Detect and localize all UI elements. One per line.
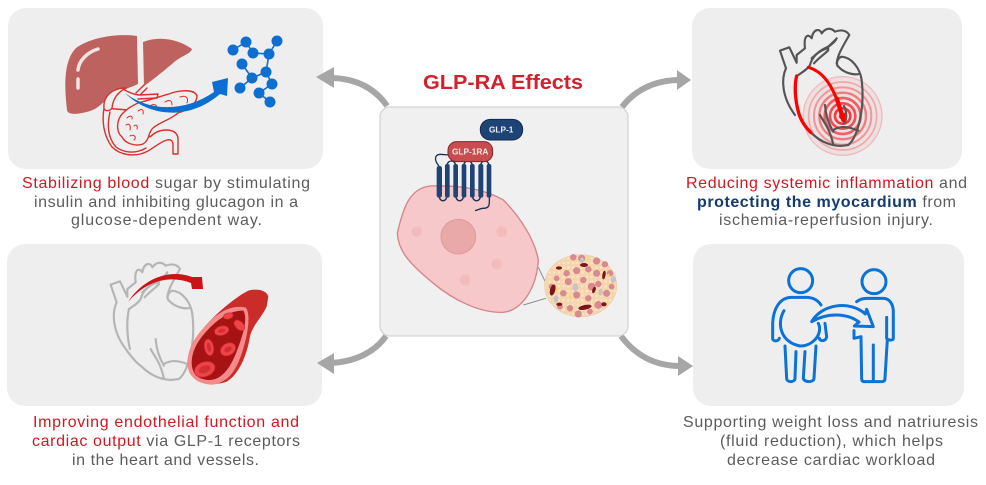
text: top-left caption: Stabilizing blood sugar by stimulating	[22, 175, 310, 192]
text: top-left caption	[22, 175, 310, 229]
text: bottom-right caption	[683, 414, 978, 469]
badge: GLP-1RA	[448, 142, 493, 162]
text: top-right caption	[686, 175, 967, 229]
receptor	[435, 154, 491, 211]
text: top-right caption: ischemia-reperfusion injury.	[719, 212, 933, 229]
icon: two figures with arrow	[773, 269, 893, 382]
text: top-left caption: glucose-dependent way.	[71, 212, 262, 229]
icon: pancreas and duodenum	[103, 85, 197, 155]
title: GLP-RA Effects	[423, 72, 583, 94]
arrow: to top-right panel	[622, 70, 691, 107]
icon: heart with target rings	[780, 29, 883, 156]
panel: top-right inflammation	[692, 8, 962, 169]
cell body	[397, 186, 538, 312]
icon: liver	[65, 35, 192, 114]
panel: centre cell illustration	[380, 107, 628, 336]
arrow: to bottom-right panel	[621, 336, 693, 376]
text: top-left caption: insulin and inhibiting glucagon in a	[34, 194, 298, 211]
text: bottom-right caption: decrease cardiac workload	[727, 452, 935, 469]
icon: blue arrow	[125, 78, 228, 113]
text: bottom-left caption	[32, 414, 300, 469]
text: bottom-right caption: Supporting weight loss and natriuresis	[683, 414, 978, 431]
text: top-right caption: Reducing systemic inflammation and	[686, 175, 967, 192]
text: bottom-left caption: in the heart and vessels.	[72, 452, 259, 469]
icon: red arc arrow	[128, 274, 203, 302]
panel: bottom-left endothelial	[7, 244, 322, 406]
badge: GLP-1: GLP-1	[489, 126, 514, 135]
icon: molecule	[228, 36, 282, 107]
arrow: to bottom-left panel	[317, 336, 386, 374]
text: bottom-left caption: cardiac output via GLP-1 receptors	[32, 433, 300, 450]
arrow: to top-left panel	[316, 67, 387, 106]
text: bottom-left caption: Improving endothelial function and	[33, 414, 299, 431]
panel: top-left blood sugar	[8, 8, 323, 169]
icon: blood vessel	[188, 290, 268, 385]
connector lines to islet	[523, 267, 546, 305]
badge: GLP-1RA: GLP-1RA	[452, 147, 489, 156]
badge: GLP-1	[480, 119, 523, 140]
text: bottom-right caption: (fluid reduction), which helps	[720, 433, 943, 450]
text: top-right caption: protecting the myocardium from	[697, 194, 956, 211]
pancreatic islet	[545, 254, 617, 317]
panel: bottom-right weight loss	[693, 244, 964, 406]
icon: grey heart	[111, 263, 193, 380]
